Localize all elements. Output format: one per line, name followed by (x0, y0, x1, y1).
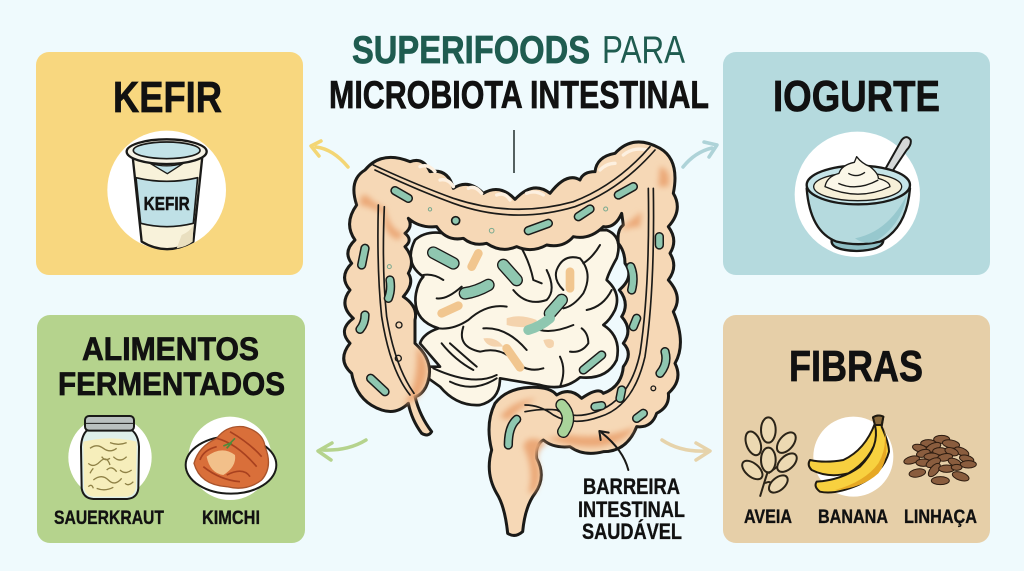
label: barreira intestinal saudável (578, 474, 685, 544)
icon: kefir cup (107, 131, 226, 249)
label: barreira intestinal saudável: BARREIRA (583, 474, 680, 499)
heading: iogurte: IOGURTE (773, 72, 940, 121)
icon: yogurt bowl (795, 132, 920, 257)
label: linhaça: LINHAÇA (904, 507, 977, 528)
label: banana: BANANA (818, 507, 888, 528)
title (329, 29, 709, 117)
label: aveia: AVEIA (744, 507, 792, 528)
icon: banana (809, 415, 893, 497)
heading: alimentos fermentados: ALIMENTOS (82, 331, 259, 367)
label: barreira intestinal saudável: SAUDÁVEL (582, 519, 682, 544)
panel: fibras (723, 315, 990, 543)
panel: kefir (36, 52, 303, 275)
title: MICROBIOTA INTESTINAL (329, 74, 709, 117)
panel: alimentos fermentados (37, 315, 305, 543)
icon: sauerkraut jar (68, 416, 152, 499)
label: barreira intestinal saudável: INTESTINAL (578, 497, 685, 522)
large intestine (344, 142, 680, 535)
icon: kimchi plate (186, 417, 276, 500)
arrow: to fermentados (318, 440, 366, 460)
heading: alimentos fermentados (58, 331, 285, 402)
title: SUPERIFOODS (352, 29, 590, 72)
arrow: to iogurte (683, 142, 717, 167)
heading: alimentos fermentados: FERMENTADOS (58, 366, 285, 402)
icon: kefir cup: KEFIR (144, 193, 190, 214)
mucosal lines (373, 147, 655, 421)
small intestine (411, 230, 619, 405)
bacteria (360, 187, 666, 445)
icon: flaxseed (903, 435, 976, 485)
arrow: to fibras (662, 440, 710, 460)
heading: kefir: KEFIR (113, 73, 222, 122)
title: PARA (602, 29, 685, 72)
illustration: intestine (344, 142, 680, 535)
colon shading (360, 167, 669, 493)
panel: iogurte (723, 52, 990, 275)
arrow: barrier pointer (599, 431, 628, 470)
arrow: to kefir (311, 141, 348, 167)
heading: fibras: FIBRAS (789, 342, 923, 391)
label: kimchi: KIMCHI (202, 508, 260, 529)
icon: oats (739, 417, 800, 497)
label: sauerkraut: SAUERKRAUT (54, 508, 164, 529)
